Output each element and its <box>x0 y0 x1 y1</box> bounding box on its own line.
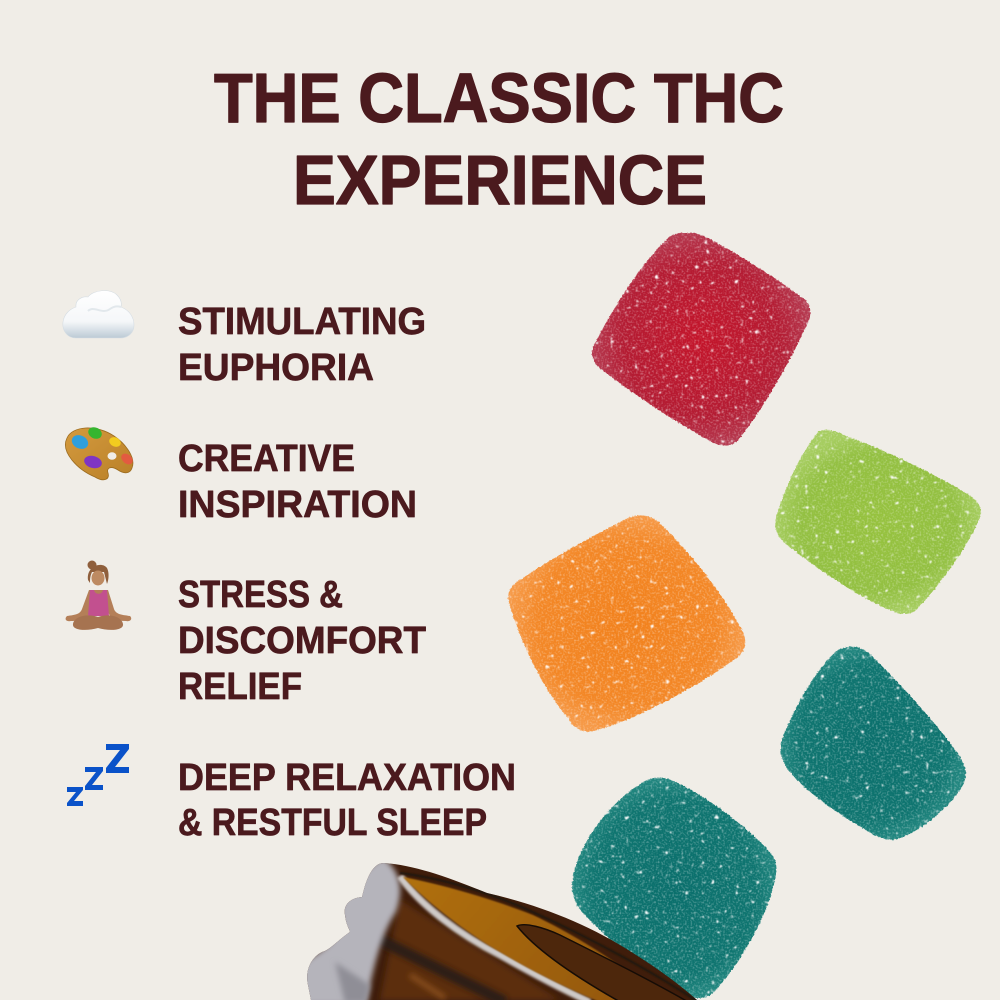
benefit: stress and discomfort relief: DISCOMFORT <box>178 620 426 662</box>
gummy: green <box>775 430 981 614</box>
benefit: stress and discomfort relief: RELIEF <box>178 666 302 708</box>
title <box>214 59 784 219</box>
title: THE CLASSIC THC <box>214 59 784 137</box>
title: EXPERIENCE <box>293 141 707 219</box>
amber glass jar <box>307 863 697 1000</box>
gummy: orange <box>508 515 745 732</box>
benefit: deep relaxation and restful sleep <box>178 757 516 844</box>
gummy: teal right <box>781 647 966 840</box>
benefit: stimulating euphoria <box>178 301 426 389</box>
benefit: creative inspiration: CREATIVE <box>178 438 355 480</box>
icon: cloud <box>63 291 134 338</box>
icon: meditating woman <box>66 560 131 630</box>
gummy: red <box>592 232 810 446</box>
benefit: creative inspiration: INSPIRATION <box>178 484 417 526</box>
benefit: stimulating euphoria: STIMULATING <box>178 301 426 343</box>
gummy: teal bottom <box>572 778 776 998</box>
icon: artist palette <box>65 425 135 480</box>
benefit: deep relaxation and restful sleep: DEEP RELAXATION <box>178 757 516 799</box>
icon: sleeping zzz <box>67 744 129 806</box>
benefit: creative inspiration <box>178 438 417 526</box>
benefit: stimulating euphoria: EUPHORIA <box>178 347 374 389</box>
benefit: stress and discomfort relief <box>178 574 426 708</box>
benefit: stress and discomfort relief: STRESS & <box>178 574 343 616</box>
benefit: deep relaxation and restful sleep: & RESTFUL SLEEP <box>178 802 487 844</box>
